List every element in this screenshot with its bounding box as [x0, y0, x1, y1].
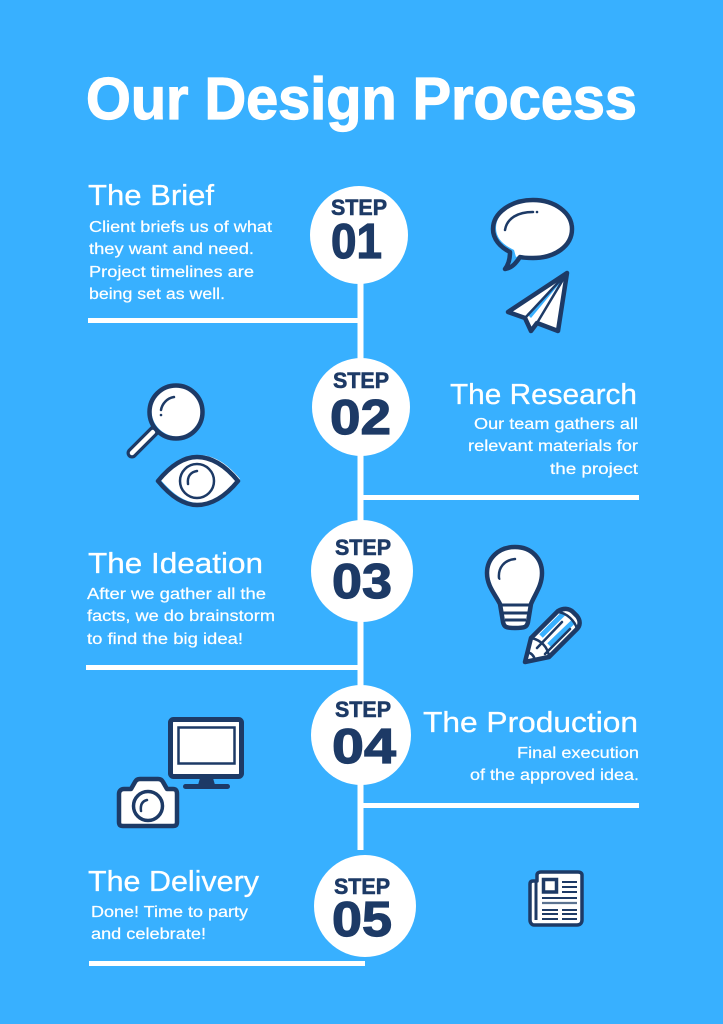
timeline connector	[86, 270, 639, 966]
text block: The Delivery: and celebrate!	[91, 926, 206, 943]
icon: camera	[119, 779, 177, 826]
text block: The Brief: Project timelines are	[89, 264, 254, 281]
text block: The Brief: they want and need.	[89, 241, 254, 258]
icon: light bulb	[487, 546, 544, 628]
step 3 badge	[311, 520, 413, 622]
text block: The Ideation: The Ideation	[88, 548, 263, 580]
step 3 badge: STEP	[335, 535, 391, 560]
step 4 badge	[311, 685, 411, 785]
icon: eye	[158, 455, 240, 505]
icon: speech bubble	[493, 200, 574, 269]
text block: The Production	[423, 707, 639, 784]
icon: paper plane	[508, 273, 567, 331]
step 1 badge: 01	[331, 215, 382, 269]
step 2 badge	[312, 358, 410, 456]
text block: The Ideation: to find the big idea!	[87, 631, 243, 648]
text block: The Research: the project	[550, 461, 639, 478]
text block: The Research: relevant materials for	[468, 438, 638, 455]
title: Our Design Process	[86, 66, 637, 132]
text block: The Delivery: Done! Time to party	[91, 904, 248, 921]
text block: The Brief: The Brief	[88, 180, 215, 212]
step 4 badge: 04	[332, 720, 396, 774]
icon: pencil	[525, 609, 580, 662]
icon: magnifying glass	[132, 384, 204, 453]
icon: monitor	[170, 720, 242, 789]
step 5 badge: STEP	[334, 874, 390, 899]
step 1 badge	[310, 186, 408, 284]
step 2 badge: 02	[330, 391, 391, 445]
icon: newspaper	[530, 872, 582, 925]
step 5 badge	[314, 855, 416, 957]
text block: The Brief: Client briefs us of what	[89, 219, 273, 236]
step 2 badge: STEP	[333, 368, 389, 393]
text block: The Research	[450, 379, 639, 478]
text block: The Research: Our team gathers all	[474, 416, 638, 433]
step 5 badge: 05	[332, 893, 392, 947]
text block: The Production: of the approved idea.	[470, 767, 639, 784]
text block: The Brief: being set as well.	[89, 286, 225, 303]
step 1 badge: STEP	[331, 195, 387, 220]
text block: The Ideation	[87, 548, 275, 648]
text block: The Ideation: facts, we do brainstorm	[87, 608, 275, 625]
text block: The Research: The Research	[450, 379, 637, 411]
text block: The Delivery: The Delivery	[88, 866, 260, 898]
text block: The Production: Final execution	[517, 745, 639, 762]
text block: The Delivery	[88, 866, 260, 943]
step 3 badge: 03	[332, 555, 392, 609]
text block: The Production: The Production	[423, 707, 638, 739]
step 4 badge: STEP	[335, 697, 391, 722]
text block: The Ideation: After we gather all the	[87, 586, 266, 603]
text block: The Brief	[88, 180, 273, 303]
